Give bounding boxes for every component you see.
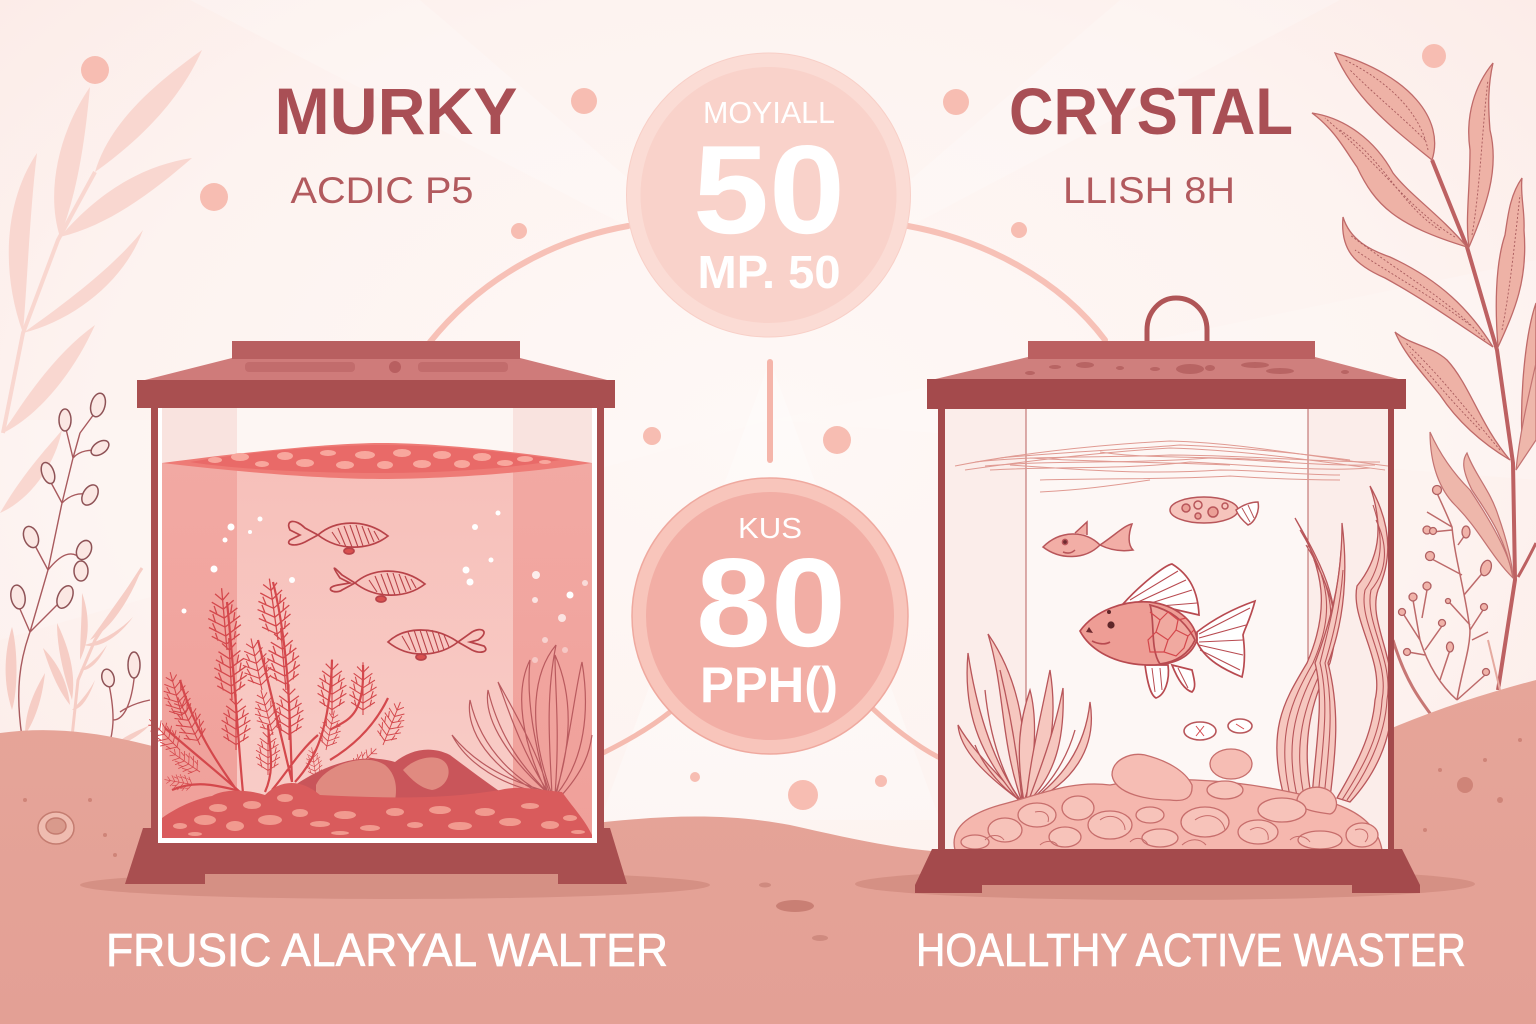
spotted fish	[1170, 497, 1258, 525]
left tank: murky	[125, 341, 627, 884]
bubbles	[182, 510, 588, 663]
main goldfish	[1080, 564, 1255, 698]
caption: left tank: FRUSIC ALARYAL WALTER	[106, 924, 668, 976]
murky rocks	[295, 750, 505, 803]
caption: right tank: HOALLTHY ACTIVE WASTER	[916, 924, 1466, 976]
bottom circle label: KUS	[738, 513, 802, 545]
shell decoration	[38, 812, 74, 844]
left seagrass	[958, 634, 1091, 802]
red coral plant	[141, 576, 412, 793]
murky gravel bed	[162, 783, 592, 838]
left tank frame	[125, 406, 627, 884]
heading: murky: MURKY	[274, 74, 518, 148]
subheading: acidic: ACDIC P5	[290, 170, 474, 211]
left tank lid	[137, 341, 615, 408]
right tank: crystal	[915, 298, 1420, 893]
pebbles floating	[1184, 719, 1252, 740]
ground hills	[0, 680, 1536, 1024]
murky water surface	[162, 443, 592, 479]
center circle: top metric	[626, 53, 910, 337]
right top frond	[1312, 53, 1536, 690]
right tank handle	[1147, 298, 1207, 342]
decorative dots	[81, 44, 1446, 810]
right tank glass interior	[945, 408, 1388, 853]
left budding stem	[9, 392, 150, 750]
small pink fish	[1043, 522, 1133, 557]
murky fish 2	[330, 568, 425, 602]
bottom circle unit: PPH()	[700, 657, 838, 713]
subheading: lush: LLISH 8H	[1063, 170, 1235, 211]
right budding stem	[1393, 486, 1493, 716]
top circle unit: MP. 50	[698, 246, 840, 298]
clear gravel bed	[954, 749, 1382, 850]
top circle label: MOYIALL	[703, 95, 835, 130]
connector lines	[430, 226, 1105, 757]
murky right seagrass	[452, 645, 592, 797]
top circle value: 50	[693, 119, 845, 260]
tall kelp	[1277, 486, 1392, 802]
heading: crystal: CRYSTAL	[1009, 74, 1293, 148]
murky fish 3	[388, 630, 486, 660]
bottom circle value: 80	[696, 532, 846, 673]
left tank glass interior	[157, 406, 597, 844]
clear water surface	[955, 441, 1388, 492]
right tank frame	[915, 408, 1420, 893]
right lower frond	[1430, 363, 1536, 690]
right tank lid	[927, 341, 1406, 409]
murky fish 1	[289, 521, 388, 554]
center circle: bottom metric	[632, 478, 908, 754]
left frond decoration	[0, 50, 202, 745]
